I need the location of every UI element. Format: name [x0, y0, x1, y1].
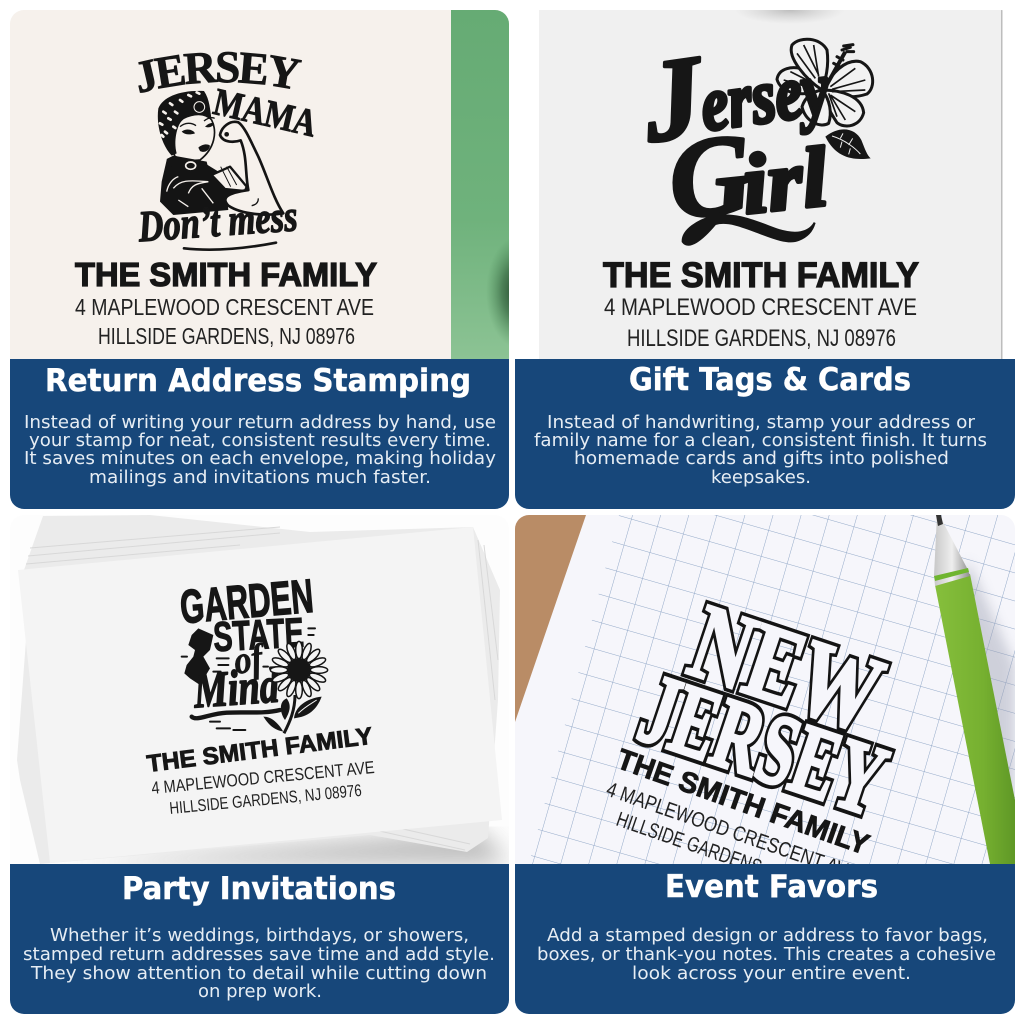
address block: 4 MAPLEWOOD CRESCENT AVE — [150, 757, 375, 798]
photo: white card — [515, 0, 1015, 359]
description: homemade cards and gifts into polished — [574, 449, 949, 469]
address block — [145, 723, 375, 818]
script: of: of — [231, 635, 269, 683]
description — [24, 413, 496, 488]
address block: THE SMITH FAMILY — [75, 256, 377, 293]
panel: return address stamping — [10, 10, 509, 509]
title: Return Address Stamping — [45, 363, 471, 399]
description: on prep work. — [198, 982, 322, 1002]
script: jersey: ersey — [695, 44, 835, 147]
icon: leaf — [825, 129, 871, 159]
description: Add a stamped design or address to favor bags, — [547, 926, 988, 946]
caption panel — [515, 864, 1015, 1014]
stamp: garden state of mind artwork — [178, 570, 328, 733]
stamp: new jersey outlined lettering: NEW — [676, 581, 896, 756]
address block: 4 MAPLEWOOD CRESCENT AVE — [603, 778, 861, 886]
description: Instead of handwriting, stamp your address or — [547, 413, 976, 433]
script: jersey: J — [634, 31, 714, 168]
address block — [603, 256, 919, 352]
icon: hibiscus flower — [777, 39, 873, 126]
description: look across your entire event. — [632, 964, 911, 984]
heading: state: STATE — [212, 609, 305, 660]
stamp: new jersey outlined lettering — [627, 581, 900, 837]
description: Whether it’s weddings, birthdays, or showers, — [50, 926, 469, 946]
swash under mind — [192, 710, 280, 718]
script: don't mess: Don’t mess — [136, 191, 299, 251]
caption panel — [10, 864, 509, 1014]
stamp: jersey girl artwork — [634, 31, 873, 245]
panel: party invitations — [10, 515, 509, 1014]
address block: THE SMITH FAMILY — [613, 743, 873, 862]
stamp: new jersey outlined lettering: JERSEY — [627, 652, 900, 837]
photo: cream paper and green backdrop — [10, 10, 550, 359]
description: It saves minutes on each envelope, making holiday — [24, 449, 496, 469]
stamp: new jersey outlined lettering: NEW — [676, 581, 896, 756]
description: Instead of writing your return address by hand, use — [24, 413, 496, 433]
description — [537, 926, 996, 984]
photo: graph paper on kraft — [515, 515, 1015, 864]
description — [23, 926, 495, 1002]
icon: green pen — [934, 515, 1015, 864]
address block: 4 MAPLEWOOD CRESCENT AVE — [604, 294, 917, 321]
title: Party Invitations — [122, 871, 396, 907]
swash underline — [184, 243, 276, 250]
title: Event Favors — [665, 869, 878, 905]
address block: THE SMITH FAMILY — [145, 723, 374, 778]
script: mind: Mind — [191, 656, 281, 718]
address block: THE SMITH FAMILY — [603, 256, 919, 295]
script: girl — [672, 136, 826, 218]
speed dashes — [182, 628, 315, 730]
script: jersey — [647, 56, 829, 144]
heading: garden: GARDEN — [178, 570, 315, 634]
caption panel — [515, 359, 1015, 509]
address block: 4 MAPLEWOOD CRESCENT AVE — [75, 294, 374, 320]
address block: HILLSIDE GARDENS, NJ 08976 — [627, 325, 896, 352]
icon: sunflower — [270, 641, 328, 699]
caption panel — [10, 359, 509, 509]
panel: gift tags and cards — [515, 0, 1015, 509]
swash under girl — [683, 215, 815, 245]
address block: HILLSIDE GARDENS, NJ 08976 — [169, 781, 363, 818]
description: mailings and invitations much faster. — [89, 468, 431, 488]
photo: stack of envelopes — [10, 515, 509, 864]
description: They show attention to detail while cutting down — [30, 964, 487, 984]
icon: new jersey map — [184, 628, 213, 685]
description: your stamp for neat, consistent results every time. — [29, 431, 491, 451]
address block: HILLSIDE GARDENS, NJ 08976 — [613, 808, 836, 904]
stamp: new jersey outlined lettering: JERSEY — [627, 652, 900, 837]
description: stamped return addresses save time and add style. — [23, 945, 495, 965]
description: keepsakes. — [711, 468, 811, 488]
description: boxes, or thank-you notes. This creates a cohesive — [537, 945, 996, 965]
script: girl: irl — [737, 130, 832, 232]
heading: mama: MAMA — [210, 81, 320, 146]
description — [534, 413, 987, 488]
panel: event favors — [515, 515, 1015, 1014]
address block — [75, 256, 377, 349]
description: family name for a clean, consistent finish. It turns — [534, 431, 987, 451]
illustration: woman flexing arm — [158, 91, 283, 215]
script: girl: G — [663, 109, 758, 243]
title: Gift Tags & Cards — [629, 362, 911, 398]
heading: jersey: JERSEY — [138, 52, 302, 93]
stamp: jersey mama artwork — [138, 52, 314, 251]
icon: stem and leaves — [263, 695, 322, 733]
address block: HILLSIDE GARDENS, NJ 08976 — [98, 323, 355, 349]
